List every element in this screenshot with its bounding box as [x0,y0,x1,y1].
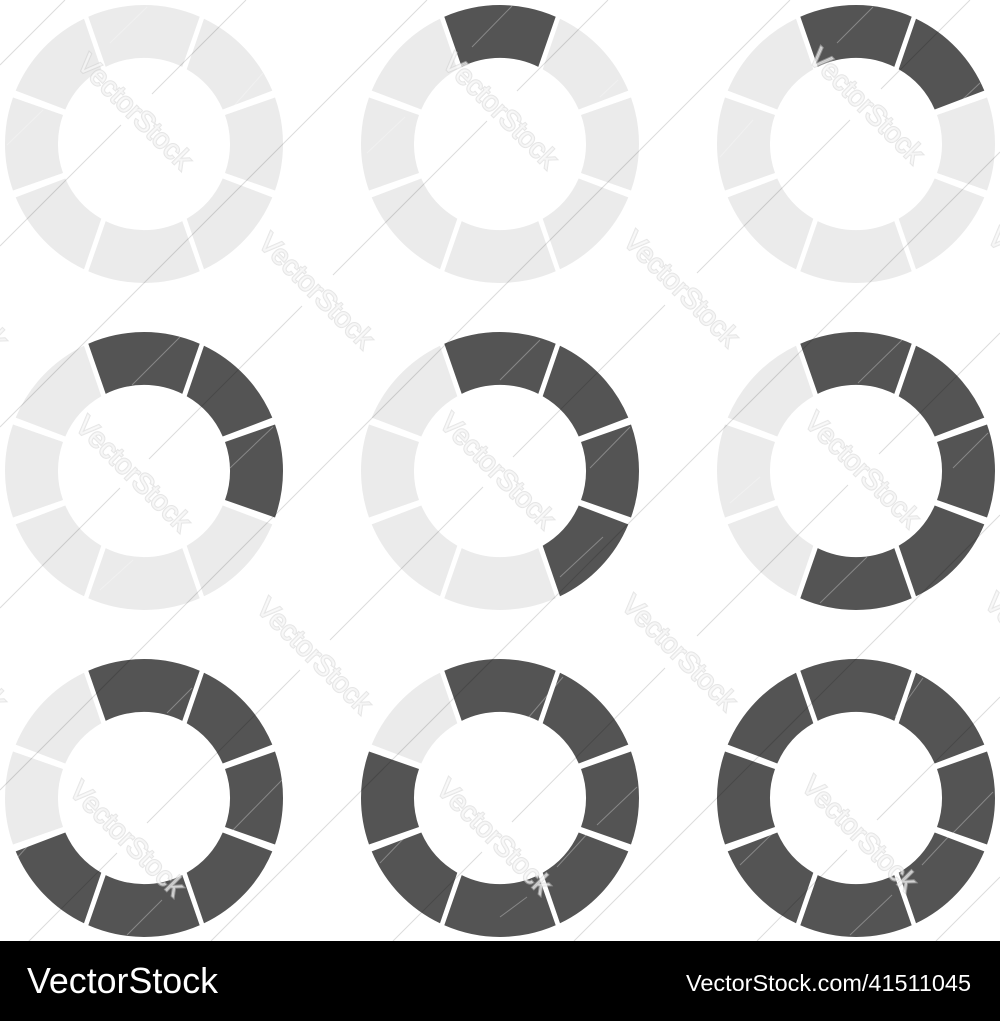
ring 7 of 8 filled [361,659,639,937]
watermark text grid: VectorStock [799,406,927,534]
watermark text grid: VectorStock [251,592,379,720]
ring 8 of 8 filled [717,659,995,937]
ring 4 of 8 filled [361,332,639,610]
watermark text grid: VectorStock [71,48,199,176]
ring 2 of 8 filled [717,5,995,283]
watermark text grid: VectorStock [796,770,924,898]
ring 0 of 8 filled [5,5,283,283]
watermark text grid: VectorStock [434,407,562,535]
footer band [0,941,1000,1021]
watermark text grid: VectorStock [618,225,746,353]
watermark text grid: VectorStock [803,42,931,170]
watermark text grid: VectorStock [616,589,744,717]
watermark text grid: VectorStock [431,773,559,901]
footer image url: VectorStock.com/41511045 [686,970,971,996]
ring 3 of 8 filled [5,332,283,610]
watermark text grid: VectorStock [64,775,192,903]
watermark text grid: VectorStock [253,227,381,355]
footer brand name: VectorStock [27,960,219,1001]
watermark text grid: VectorStock [70,410,198,538]
ring 5 of 8 filled [717,332,995,610]
watermark text grid: VectorStock [437,47,565,175]
ring 6 of 8 filled [5,659,283,937]
ring 1 of 8 filled [361,5,639,283]
